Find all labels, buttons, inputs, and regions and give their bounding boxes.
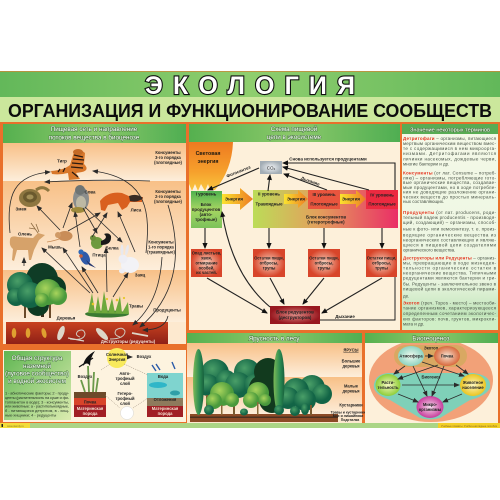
diagram: land and water ecosystem: Воздух [137,354,152,359]
text: definitions: Продуценты (от лат. producens, роди- [403,210,496,215]
food web labels: (травоядные) [147,250,175,254]
text: community legend: центы (растительность на суше и фи- [5,395,70,400]
icon: owl [71,185,89,213]
food web labels: Травы [129,304,143,308]
icon: tiger [51,149,87,180]
heading: community structure: и водной экосистем [8,377,66,385]
text: definitions: редуцентами являются бактерии и гри- [403,276,496,280]
text: community legend: топланктон в воде); 3 - консументы, [5,399,69,404]
food web labels: Консументы [155,189,181,194]
food web labels: 1-го порядка [148,244,175,250]
forest layer labels: деревья [342,364,360,368]
icon: snake [19,188,49,207]
scheme arrow labels: Фотосинтез [226,164,252,179]
remains boxes: трупы [318,266,331,270]
food web labels: Белка [105,246,119,250]
light energy sun: Световая [196,151,220,157]
panel: term definitions [402,124,498,330]
remains boxes: трупы [263,266,276,270]
text: definitions: водящие органические вещества из [403,232,496,238]
text: definitions: определенным сочетанием экологичес- [403,311,496,316]
text: definitions: многие бактерии и др. [403,162,449,166]
diagram: land and water ecosystem: трофный [115,376,135,381]
icon: deer [10,223,45,261]
text: community legend [5,390,70,418]
text: definitions: ляю) – организмы, потребляющие гото- [403,175,496,180]
text: community legend: 1 - абиотические факторы; 2 - проду- [5,390,70,396]
heading: food web: Пищевая сеть и направление [51,126,138,133]
icon: bird [78,249,96,268]
ecotope group: Атмосфера [399,354,423,358]
illustration: forest [190,349,338,422]
level I producers box [191,191,222,228]
heading: food web [3,124,186,143]
text: definitions: пищевой цепи в экологической пирами- [403,286,496,292]
level I producers box: Блок [201,202,212,207]
remains boxes [191,249,397,277]
decomposers box: (деструкторов) [279,315,312,320]
heading: food web: потоков вещества в биоценозе [49,134,140,142]
biogeocenosis arrows [394,356,468,402]
heading: biogeocenosis: Биогеоценоз [412,336,450,342]
energy arrows: Энергия [225,196,243,202]
food web labels: 3-го порядка [155,155,182,160]
title band: ЭКОЛОГИЯ [145,72,355,100]
consumers block: II уровень [258,192,280,196]
CO2 box [260,161,282,174]
text: definitions: ния не доводящие разложение органи- [403,190,496,194]
food web labels: Заяц [135,272,146,278]
food web labels: Сова [85,190,96,194]
diagram: land and water ecosystem: Материнская [152,406,179,411]
biocenosis group: Расти- [381,380,395,385]
consumers block: Травоядные [255,202,283,206]
forest layer labels: Кустарники [339,402,363,408]
forest layer labels: ЯРУСЫ [343,348,359,352]
biocenosis group: тельность [377,385,399,390]
title band [0,71,500,100]
text: definitions: мы, превращающие в ходе жизнедея- [403,260,496,266]
text: definitions: тельный падеж producentis - производя- [403,214,496,220]
soil strip: decomposers: Деструкторы (редуценты) [101,339,156,344]
scheme arrow labels: Снова используется продуцентами [289,156,367,162]
biocenosis group: организмы [419,407,442,412]
forest layer labels: Мох и лишайники [333,414,363,418]
ecotope group: Почва [441,354,454,358]
remains boxes: их частей. [196,270,217,275]
text: definitions: де. [403,294,409,298]
text: community legend: ные-хищники; 4 - редуценты [5,412,56,418]
heading: community structure: наземной [23,362,52,370]
text: definitions: низмами. Детритофагами являются [403,151,497,156]
diagram: land and water ecosystem: слой [120,401,130,406]
text: definitions: ческих веществ до простых минераль- [403,194,496,199]
consumers block: (гетеротрофные) [307,220,345,224]
text: community legend: б - питающиеся детритом, в - хищ- [5,408,70,413]
footer strip: www.stendy.ru [7,424,24,428]
food web labels: Змея [15,206,27,212]
panel: community structure [3,348,186,422]
footer strip: Учебные плакаты. Учебно-наглядные пособия [441,424,498,428]
text: definitions: ных составляющих. [403,199,444,204]
food web labels: (плотоядные) [154,199,183,204]
heading: community structure: (луговое сообщество) [5,370,69,378]
biocenosis group: Животное [462,380,484,385]
energy arrows: Энергия [342,196,360,202]
light energy sun [189,142,233,191]
diagram: land and water ecosystem: порода [83,411,98,416]
forest layer labels: Травы и кустарники [331,410,365,414]
icon: trees [7,263,67,318]
level I producers box: (авто- [200,212,213,217]
text: definitions: мые продуцентами, но в ходе потребле- [403,185,496,190]
text: definitions: Консументы (от лат. Consume – потреб- [403,170,496,176]
heading: term definitions [402,124,498,134]
energy arrows: Энергия [287,196,305,202]
food web labels: Тигр [57,158,67,164]
food web arrows [9,171,175,330]
consumers block: Плотоядные [310,202,338,206]
diagram: land and water ecosystem: Почва [84,400,97,404]
biocenosis group: Микро- [423,402,438,407]
panel: forest layers [187,333,365,423]
forest layer labels: Большие [342,358,361,364]
remains boxes: Опад листьев, [192,250,221,256]
food web labels: (плотоядные) [154,160,183,165]
text: definitions: щиеся в пищевой цепи создателями [403,242,496,248]
icon: fox [100,193,143,211]
footer strip [0,423,500,428]
subtitle band: ОРГАНИЗАЦИЯ И ФУНКЦИОНИРОВАНИЕ СООБЩЕСТВ [8,100,492,121]
text: definitions: ких факторов: почв, грунтов, микрокли- [403,316,496,322]
level I producers box: I уровень [196,192,217,196]
food web labels: Лиса [131,208,142,212]
text: definitions: тельности органические остатки в [403,266,497,270]
diagram: land and water ecosystem: Энергия [109,357,126,362]
forest layer labels: Малые [344,384,359,388]
remains boxes: Остатки пищи, [254,256,284,260]
heading: food chain scheme: Схема пищевой [271,125,318,133]
diagram: land and water ecosystem: Воздух [78,374,93,379]
forest layer labels: Подстилка [341,418,359,422]
soil strip: decomposers [6,322,168,344]
text: definitions: тание организмов, характеризующееся [403,306,497,310]
biocenosis group: Биогеноз [422,374,440,380]
heading: forest layers: Ярусность в лесу [249,336,300,342]
text: definitions: Детритофаги – организмы, питающиеся [403,135,497,141]
scheme arrows [205,163,395,320]
remains boxes: особей, [199,266,214,270]
icon: squirrel [90,233,111,249]
icon: hare [118,244,139,274]
heading: food chain scheme: цепи в экосистеме [267,134,322,141]
food web labels: Птица [92,252,106,258]
panel: food chain scheme [189,124,400,330]
CO2 box: CO₂ [267,166,276,170]
energy arrows [222,188,366,210]
consumers block [253,190,398,228]
food web labels: Деревья [57,316,76,320]
diagram: land and water ecosystem: трофный [115,396,135,401]
remains boxes: Остатки пищи, [367,256,396,260]
consumers block: IV уровень [370,192,394,198]
remains boxes: отбросы, [315,260,333,266]
panel: food web [3,124,186,344]
consumers block: Плотоядные [368,202,396,206]
remains boxes: отмирание [196,260,218,266]
scheme arrow labels: Дыхание [300,175,321,187]
diagram: land and water ecosystem: Материнская [77,406,104,411]
text: definitions: неорганические вещества. Типичными [403,270,496,276]
heading: community structure [5,354,69,385]
food web labels: Олень [18,232,32,236]
text: definitions: ные к фото- или хемосинтезу, т. е. произ- [403,226,496,232]
poster background [0,71,500,428]
text: definitions: мертвым органическим веществом вмес- [403,141,496,146]
decomposers box [270,306,320,324]
text: definitions [403,135,497,326]
diagram: land and water ecosystem: Гетеро- [118,391,133,396]
forest layer labels [331,348,365,422]
food web labels: Консументы [155,150,181,155]
remains boxes: трупы [375,266,388,270]
diagram: land and water ecosystem: Солнечная [106,352,129,357]
heading: forest layers [187,333,362,343]
text: definitions: те с содержащимися в нем микроорга- [403,146,496,151]
panel: biogeocenosis [365,333,498,423]
diagram: land and water ecosystem: Авто- [119,371,131,376]
scheme arrow labels: Дыхание [335,314,355,319]
biocenosis group: население [462,385,484,390]
text: definitions: вые органические вещества, создавае- [403,180,496,185]
heading: community structure: Общая структура [12,354,63,362]
food web labels [15,150,183,320]
food web labels: Мышь [48,244,62,250]
diagram: land and water ecosystem: слой [120,381,130,386]
remains boxes: отбросы, [372,260,391,266]
text: definitions: бы. Редуценты - заключительное звено в [403,282,497,286]
diagram: land and water ecosystem: Отложения [154,397,177,402]
text: definitions: личинки насекомых, дождевые черви, [403,156,496,162]
diagram: land and water ecosystem: Вода [158,374,169,379]
food web labels: 2-го порядка [155,194,182,199]
consumers block: Блок консументов [306,214,346,220]
scheme arrow labels [226,156,367,319]
diagram: land and water ecosystem: порода [158,411,173,416]
heading: food chain scheme [189,124,400,142]
remains boxes: отбросы, [260,260,278,266]
icon: mouse [47,231,72,242]
consumers block: III уровень [312,192,336,197]
level I producers box: продуцентов [192,207,221,212]
food web labels: Продуценты [153,308,181,312]
biocenosis group [374,373,490,420]
light energy sun: энергия [198,159,218,165]
text: definitions: щий, создающий) – организмы, способ- [403,219,496,225]
text: definitions: Экотоп (греч. Topos - место) – местооби- [403,300,496,306]
heading: term definitions: Значение некоторых терминов [410,128,490,134]
diagram: land and water ecosystem [74,348,183,420]
decomposers box: Блок редуцентов [276,310,314,314]
text: definitions: Деструкторы или Редуценты – организ- [403,256,496,260]
forest layer labels: деревья [342,388,360,394]
food web labels: Консументы [148,240,174,244]
level I producers box: трофные) [195,217,217,222]
text: community legend: или животные: а - растительноядные, [5,404,69,409]
ecotope group [394,345,467,367]
text: definitions: мата и др. [403,322,424,326]
text: definitions: органического вещества. [403,248,455,252]
remains boxes: Остатки пищи, [309,256,339,260]
ecotope group: Экотоп [424,346,439,350]
icon: grass [85,291,129,318]
remains boxes: хвоя, [201,256,212,260]
text: definitions: неорганических составляющих и являю- [403,238,496,242]
